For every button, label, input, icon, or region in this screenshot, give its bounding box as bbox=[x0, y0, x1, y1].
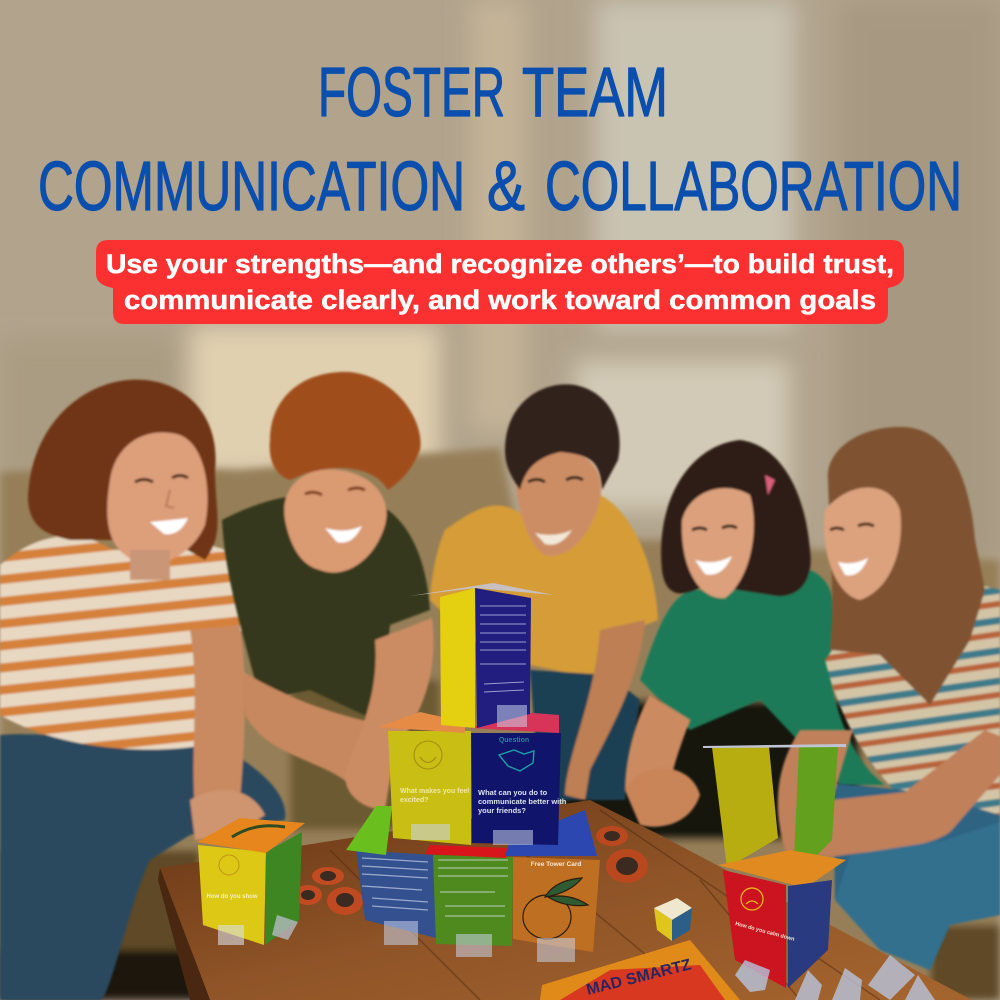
plastic stands bbox=[735, 955, 935, 1000]
pink and orange cap cards bbox=[378, 712, 465, 733]
subtitle text: communicate clearly, and work toward common goals bbox=[124, 285, 876, 315]
centre card tower bbox=[346, 583, 600, 962]
left card box: How do you show bbox=[206, 894, 258, 900]
title line one: TEAM bbox=[522, 53, 668, 131]
yellow card question: excited? bbox=[400, 797, 428, 804]
game tokens bbox=[294, 826, 648, 915]
person 1: laughing girl in striped shirt bbox=[0, 380, 285, 1000]
navy card question: communicate better with bbox=[478, 797, 567, 806]
sad face icon bbox=[741, 888, 763, 910]
title bbox=[38, 53, 962, 225]
middle row: navy question card bbox=[471, 733, 561, 845]
die bbox=[654, 898, 692, 941]
subtitle text: Use your strengths—and recognize others’—to build trust, bbox=[106, 249, 894, 279]
title line two: & bbox=[487, 147, 525, 225]
yellow card bbox=[712, 747, 778, 868]
sofa bbox=[0, 448, 1000, 1000]
small body text lines on bottom cards bbox=[362, 858, 508, 916]
title line two: COMMUNICATION bbox=[38, 147, 465, 225]
tower bottom row: orange card bbox=[513, 857, 600, 952]
smiley icon bbox=[414, 741, 442, 769]
red, green and blue cards lying across the row bbox=[346, 806, 392, 855]
background: wall with window light bbox=[0, 0, 1000, 560]
top row: yellow card bbox=[440, 588, 475, 728]
left card box bbox=[197, 818, 305, 945]
middle row: yellow question card bbox=[388, 731, 471, 845]
top cap card bbox=[410, 583, 554, 596]
cap card bbox=[703, 744, 846, 748]
yellow card question: What makes you feel bbox=[400, 788, 469, 795]
red card bbox=[723, 870, 786, 988]
handshake icon bbox=[499, 750, 534, 771]
person 2: red-haired boy in olive shirt bbox=[222, 372, 433, 810]
top row: navy card bbox=[475, 588, 531, 728]
navy card question: What can you do to bbox=[478, 788, 548, 797]
coffee table bbox=[158, 800, 972, 1000]
green card bbox=[793, 747, 838, 880]
tower bottom row: green card bbox=[433, 855, 513, 946]
navy card question: your friends? bbox=[478, 806, 526, 815]
yellow card bbox=[198, 845, 266, 945]
free tower card label: Free Tower Card bbox=[531, 861, 581, 868]
question heading: Question bbox=[499, 737, 529, 744]
plastic card stands bbox=[384, 705, 575, 962]
title line one: FOSTER bbox=[318, 53, 505, 131]
game box bbox=[540, 940, 740, 1000]
subtitle banner bbox=[96, 240, 904, 324]
orange fruit icon bbox=[523, 878, 588, 939]
orange middle card bbox=[718, 850, 846, 888]
game box: MAD SMARTZ bbox=[585, 956, 693, 999]
red banner shape bbox=[96, 240, 904, 324]
person 4: girl in green shirt bbox=[625, 440, 885, 827]
green card bbox=[265, 832, 302, 945]
tower bottom row: blue card bbox=[356, 850, 436, 938]
navy card text lines bbox=[480, 606, 526, 692]
navy card bbox=[788, 880, 832, 988]
person 3: dark-haired boy in yellow shirt bbox=[430, 384, 658, 800]
orange top card bbox=[197, 818, 305, 853]
person 5: girl in striped shirt and jeans bbox=[778, 427, 1000, 970]
right card stack bbox=[703, 744, 935, 1000]
red card question: How do you calm down bbox=[734, 921, 796, 943]
